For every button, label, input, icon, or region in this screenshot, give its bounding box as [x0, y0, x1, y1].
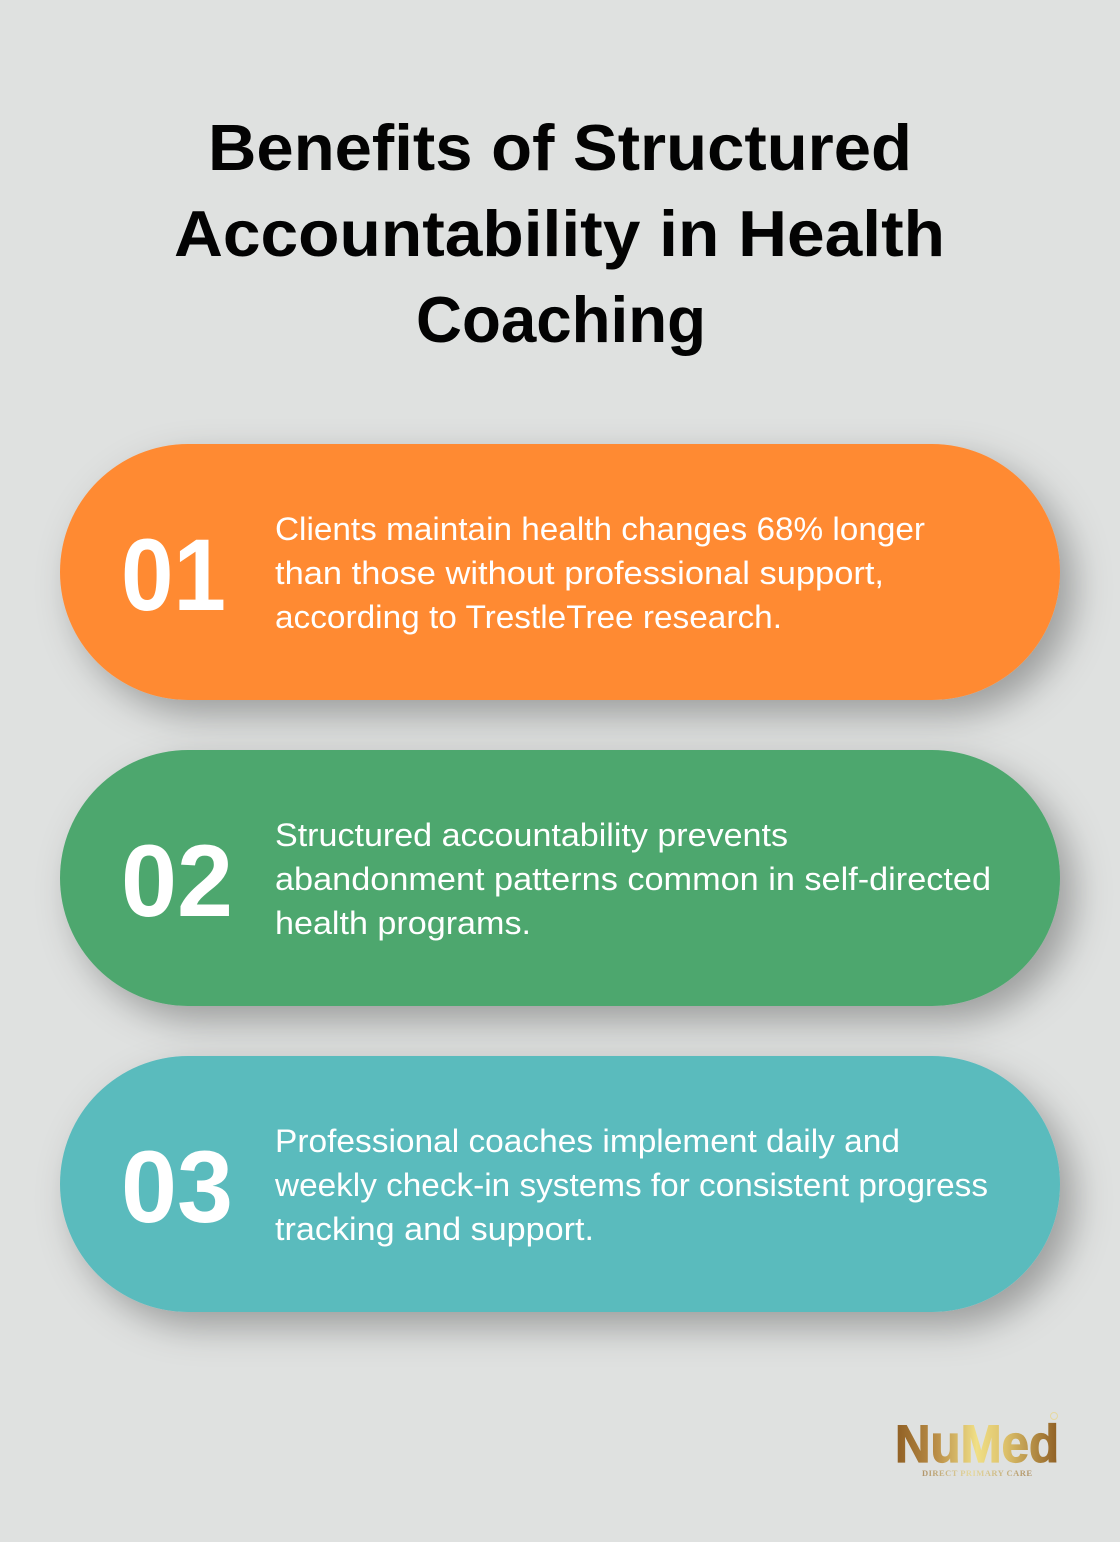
text block: benefit 02: abandonment patterns common in self-directed [275, 861, 991, 897]
text block: benefit 02 [275, 817, 991, 941]
number 02: 02 [121, 824, 233, 938]
pill background: green [60, 750, 1060, 1006]
title: Coaching [416, 283, 706, 356]
logo: NuMed: NuMed [895, 1415, 1059, 1474]
text block: benefit 01 [275, 511, 925, 635]
number 03: 03 [121, 1130, 233, 1244]
text block: benefit 02: Structured accountability prevents [275, 817, 788, 853]
pill background: orange [60, 444, 1060, 700]
text block: benefit 03 [274, 1123, 988, 1247]
text block: benefit 02: health programs. [275, 905, 531, 941]
text block: benefit 01: than those without professional support, [275, 555, 884, 591]
panel: benefit 03 [60, 1056, 1060, 1312]
title [174, 111, 945, 356]
text block: benefit 01: Clients maintain health changes 68% longer [275, 511, 925, 547]
title: Accountability in Health [174, 197, 945, 270]
text block: benefit 03: Professional coaches implement daily and [275, 1123, 900, 1159]
text block: benefit 03: weekly check-in systems for consistent progress [274, 1167, 988, 1203]
logo: NuMed: DIRECT PRIMARY CARE [922, 1468, 1032, 1478]
panel: benefit 01 [60, 444, 1060, 700]
number 01: 01 [121, 518, 226, 632]
text block: benefit 03: tracking and support. [275, 1211, 594, 1247]
title: Benefits of Structured [208, 111, 912, 184]
panel: benefit 02 [60, 750, 1060, 1006]
pill background: teal [60, 1056, 1060, 1312]
text block: benefit 01: according to TrestleTree research. [275, 599, 782, 635]
